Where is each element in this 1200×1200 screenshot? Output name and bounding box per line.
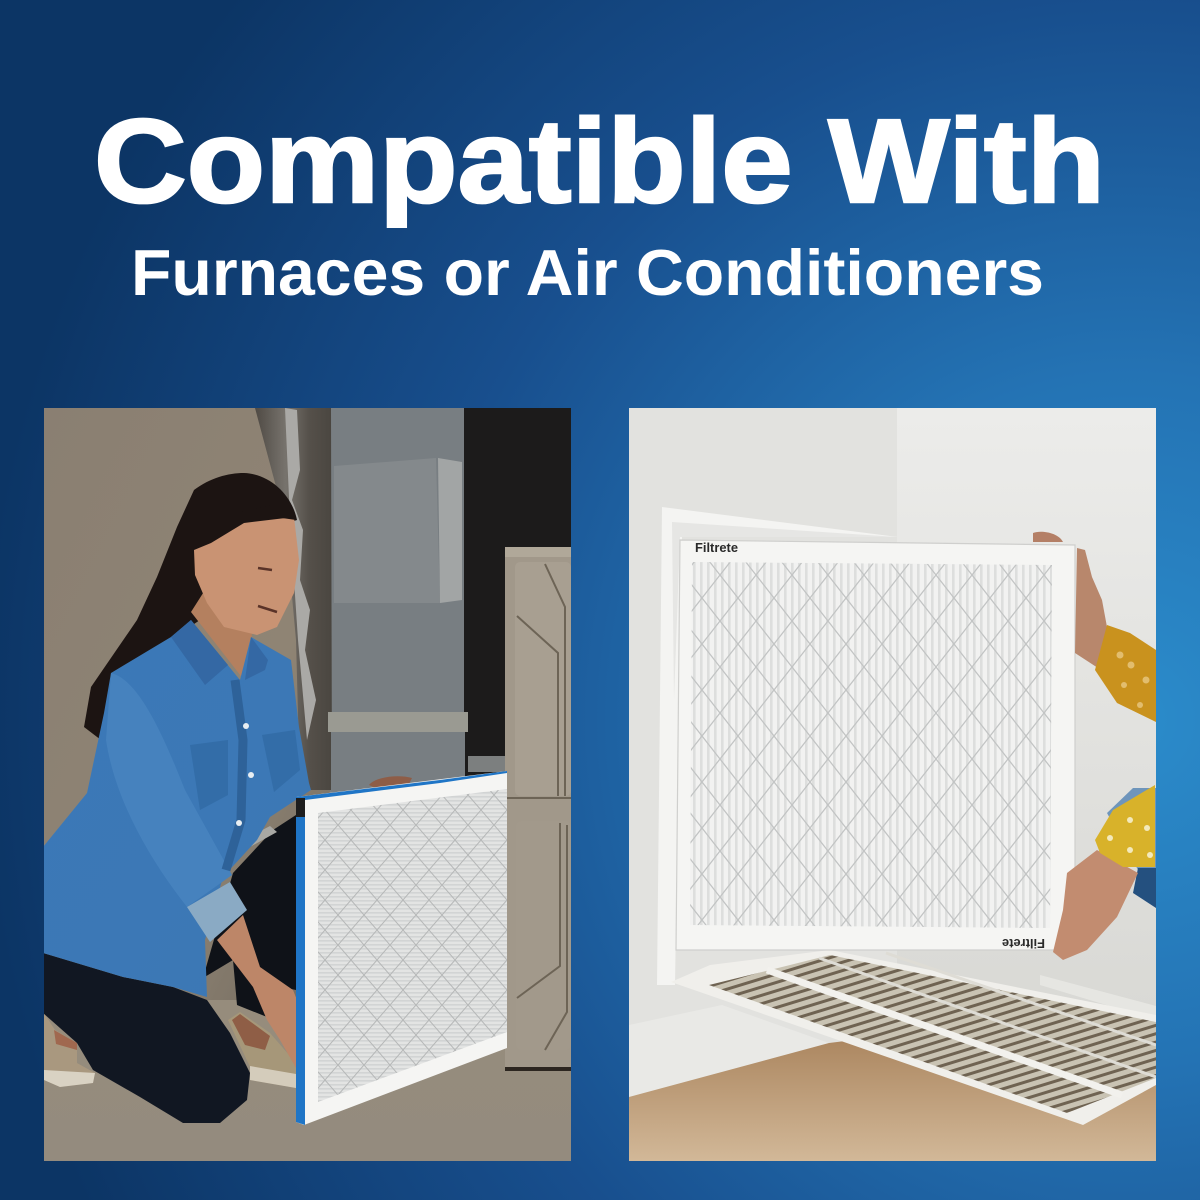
- air filter: [676, 540, 1075, 951]
- panel: air conditioner photo: [629, 408, 1156, 1161]
- right wall: [897, 408, 1156, 1040]
- wall opening frame: [657, 507, 898, 985]
- foil duct: [255, 408, 332, 790]
- hair: [84, 473, 297, 740]
- vent behind filter: [468, 756, 506, 772]
- near shoe: [44, 1013, 95, 1087]
- breast pockets: [190, 730, 300, 810]
- collar: [171, 620, 268, 685]
- filter brand bottom: Filtrete: [1002, 936, 1045, 951]
- filter brand top: Filtrete: [695, 540, 738, 555]
- lower duct ledge: [328, 712, 468, 732]
- eye and mouth: [258, 568, 277, 612]
- far hand: [369, 776, 412, 788]
- cuff: [187, 882, 247, 942]
- lower hand and sleeve: [1053, 785, 1156, 960]
- wood floor: [629, 1030, 1156, 1161]
- subtitle: Furnaces or Air Conditioners: [131, 236, 1044, 309]
- title: Compatible With: [94, 95, 1105, 228]
- woman: [43, 473, 412, 1123]
- arm and hand: [217, 915, 296, 1068]
- panel: furnace photo: [43, 408, 571, 1161]
- metal plenum box: [334, 458, 440, 603]
- pants: [43, 953, 250, 1123]
- hair over forehead: [282, 517, 294, 520]
- placket and buttons: [226, 680, 254, 870]
- left wall: [629, 408, 899, 1161]
- upper hand and sleeve: [1033, 532, 1156, 722]
- lower wall behind filter: [331, 732, 465, 792]
- shirt: [43, 620, 311, 997]
- floor: [44, 1000, 571, 1161]
- far shoe: [228, 1012, 296, 1088]
- air filter: [296, 771, 507, 1125]
- baseboard: [629, 1005, 829, 1097]
- face: [194, 517, 299, 635]
- sleeve: [106, 673, 232, 907]
- dark background wall: [464, 408, 571, 778]
- far leg: [203, 815, 296, 1017]
- return air grille: [671, 950, 1156, 1125]
- box side panel: [438, 458, 462, 603]
- grey utility wall: [330, 408, 466, 808]
- neck: [191, 590, 252, 680]
- furnace cabinet: [505, 547, 571, 1071]
- shirt glint: [251, 826, 277, 846]
- concrete wall: [44, 408, 344, 1028]
